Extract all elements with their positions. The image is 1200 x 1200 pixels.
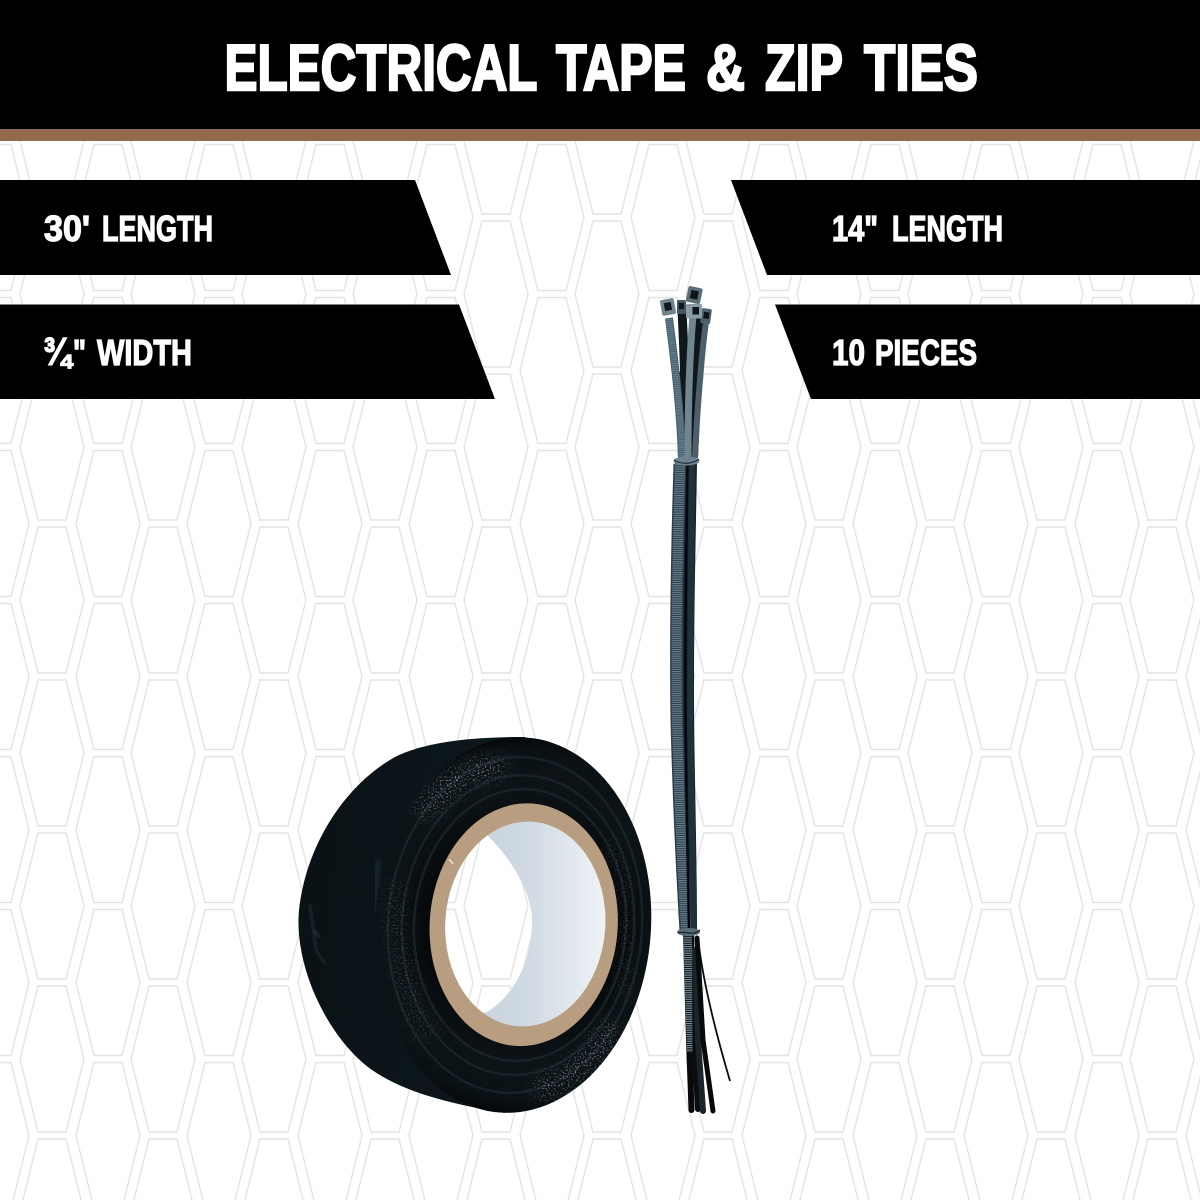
title: TAPE — [556, 31, 686, 104]
small core nick — [449, 859, 453, 864]
banner: 10 pieces: PIECES — [875, 332, 977, 373]
zip tie heads — [660, 286, 712, 324]
title — [224, 31, 978, 104]
banner: 14 inch length: LENGTH — [892, 208, 1003, 249]
cardboard core — [430, 803, 618, 1046]
banner: 10 pieces: 10 — [832, 332, 865, 373]
tape outer side — [298, 737, 560, 1113]
hole inner surface — [445, 822, 606, 1026]
title: TIES — [864, 31, 978, 104]
icon: zip ties bundle — [660, 286, 730, 1111]
tape side crease — [310, 905, 326, 965]
icon: roll of black electrical tape — [298, 737, 652, 1113]
banner: 10 pieces — [775, 304, 1200, 399]
banner: 3/4 inch width — [0, 304, 495, 399]
tape side highlight — [376, 860, 381, 960]
zip tie upper fan — [669, 310, 706, 458]
title: ZIP — [765, 31, 843, 104]
lower binding band — [677, 928, 700, 936]
tape surface grain and gloss — [376, 745, 636, 1106]
banner: 3/4 inch width: " — [73, 332, 86, 373]
title: & — [706, 31, 745, 104]
tape front face — [375, 737, 652, 1113]
banner: 3/4 inch width: WIDTH — [97, 332, 192, 373]
banner: 14 inch length — [731, 180, 1200, 275]
zip tie tails — [683, 935, 730, 1111]
banner: 3/4 inch width: ¾ — [43, 331, 74, 374]
zip tie shafts — [673, 462, 697, 932]
banner: 30' length — [0, 180, 451, 275]
banner: 30' length: LENGTH — [102, 208, 213, 249]
banner: 30' length: 30' — [44, 208, 90, 249]
see-through opening — [445, 836, 532, 1013]
title: ELECTRICAL — [224, 31, 538, 104]
header bar — [0, 0, 1200, 141]
banner: 14 inch length: 14" — [832, 208, 878, 249]
upper binding band — [674, 456, 700, 466]
